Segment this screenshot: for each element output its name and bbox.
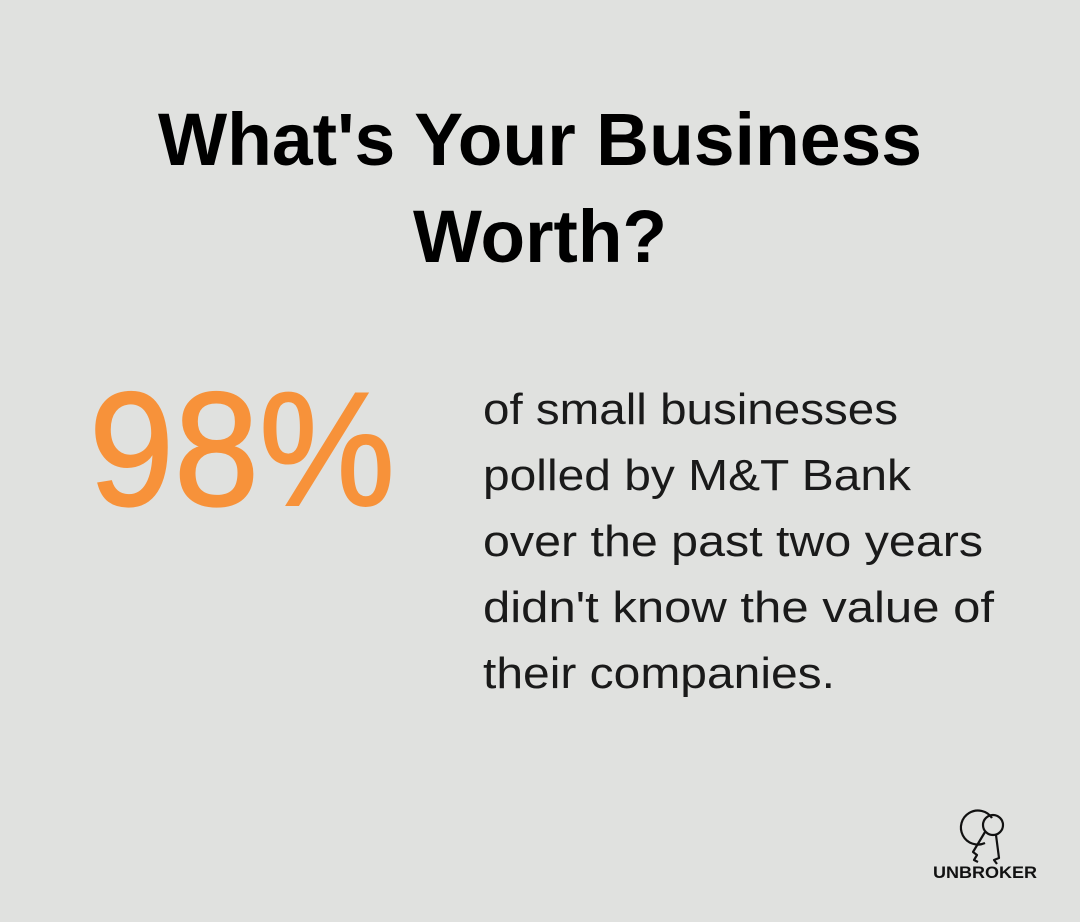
title: What's Your Business: [158, 98, 922, 181]
description text: didn't know the value of: [483, 583, 995, 632]
logo: unbroker keys: [933, 811, 1037, 882]
logo: unbroker keys: UNBROKER: [933, 863, 1037, 882]
big stat: 98%: 98%: [89, 359, 395, 540]
description text: polled by M&T Bank: [483, 451, 912, 500]
description text: [483, 385, 995, 698]
description text: their companies.: [483, 649, 835, 698]
description text: over the past two years: [483, 517, 983, 566]
description text: of small businesses: [483, 385, 898, 434]
title: [158, 98, 922, 278]
title: Worth?: [413, 195, 667, 278]
